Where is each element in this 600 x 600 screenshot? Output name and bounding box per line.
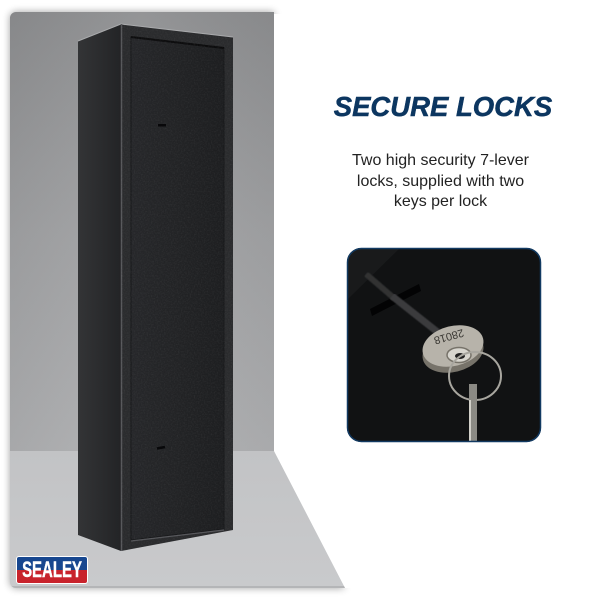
description: locks, supplied with two xyxy=(357,172,524,190)
photo background xyxy=(10,12,350,588)
safe cabinet xyxy=(78,24,233,551)
logo: SEALEY: SEALEY xyxy=(22,557,82,582)
description: Two high security 7-lever xyxy=(352,152,529,169)
description xyxy=(352,152,529,210)
key shaft xyxy=(366,274,395,299)
safe door xyxy=(131,37,224,540)
key ring xyxy=(449,352,501,400)
key slot xyxy=(370,284,421,316)
safe left side xyxy=(78,24,121,551)
key head xyxy=(422,344,484,373)
safe front frame xyxy=(121,24,233,551)
description: keys per lock xyxy=(394,193,487,210)
key photo xyxy=(347,248,541,442)
safe surface texture xyxy=(121,24,233,551)
lower keyhole xyxy=(157,447,165,448)
key number: 28018 xyxy=(432,326,465,346)
second key xyxy=(469,384,477,442)
title: SECURE LOCKS xyxy=(334,91,552,122)
upper keyhole xyxy=(158,124,166,126)
